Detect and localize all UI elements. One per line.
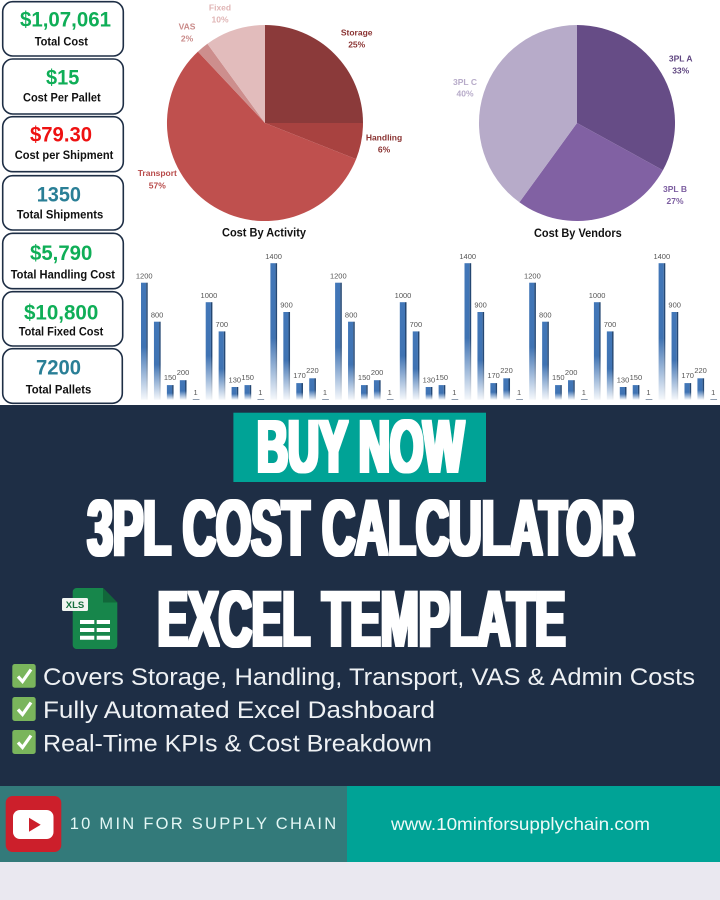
bar group 6: 220 xyxy=(500,366,513,375)
KPI: cost per pallet: Cost Per Pallet xyxy=(23,92,101,104)
bar group 6: 170 xyxy=(487,371,500,380)
KPI: total handling cost xyxy=(3,233,123,289)
pie chart: cost by vendors: 40% xyxy=(456,89,474,99)
bar group 8 xyxy=(589,291,652,400)
KPI: total handling cost: $5,790 xyxy=(30,242,92,265)
bar group 5: 130 xyxy=(423,376,435,384)
bar group 7: 800 xyxy=(539,310,552,319)
pie chart: cost by activity: VAS xyxy=(179,21,196,31)
pie chart: cost by vendors xyxy=(453,25,693,240)
bar group 7: 1 xyxy=(582,388,586,397)
footer: channel bar xyxy=(0,786,347,862)
panel: navy promo background xyxy=(0,405,720,786)
button: buy now xyxy=(233,405,486,488)
bullet: KPIs: Real-Time KPIs & Cost Breakdown xyxy=(43,731,432,758)
panel: KPI cards xyxy=(3,2,123,403)
bar group 1 xyxy=(136,271,199,400)
bar group 9: 900 xyxy=(668,300,681,310)
bar group 3 xyxy=(265,252,329,400)
KPI: cost per shipment: $79.30 xyxy=(30,124,92,147)
bar group 3: 1400 xyxy=(265,252,282,261)
bullet: cost coverage: Covers Storage, Handling, Transport, VAS & Admin Costs xyxy=(43,664,695,691)
KPI: total fixed cost: $10,800 xyxy=(24,301,98,324)
bar group 2: 130 xyxy=(229,376,241,384)
KPI: total cost xyxy=(3,2,123,56)
pie chart: cost by vendors: 33% xyxy=(672,66,690,76)
feature list xyxy=(12,664,695,758)
bar group 1: 1200 xyxy=(136,271,153,280)
pie chart: cost by activity: Handling xyxy=(366,133,402,143)
bar group 9: 170 xyxy=(681,371,694,380)
KPI: total handling cost: Total Handling Cost xyxy=(11,269,115,281)
pie chart: cost by activity: 10% xyxy=(211,15,229,25)
bar group 5: 1000 xyxy=(395,291,411,300)
bar group 9: 1400 xyxy=(653,252,670,261)
KPI: cost per shipment: Cost per Shipment xyxy=(15,150,113,162)
footer: website bar: www.10minforsupplychain.com xyxy=(390,814,650,834)
bar group 8: 150 xyxy=(630,373,642,382)
bar group 7: 200 xyxy=(565,368,577,377)
bar group 6: 900 xyxy=(474,300,487,310)
KPI: total cost: $1,07,061 xyxy=(20,9,111,32)
bar group 9: 1 xyxy=(711,388,715,397)
bar group 4: 150 xyxy=(358,373,370,382)
bar group 5: 1 xyxy=(452,388,456,397)
pie chart: cost by vendors: Cost By Vendors xyxy=(534,228,622,240)
bar group 5: 700 xyxy=(410,320,422,329)
bar group 8: 700 xyxy=(604,320,616,329)
pie chart: cost by activity: 25% xyxy=(348,39,366,49)
bar group 1: 200 xyxy=(177,368,189,377)
pie chart: cost by activity: 6% xyxy=(378,144,391,154)
icon: YouTube xyxy=(6,796,61,852)
KPI: cost per pallet xyxy=(3,59,123,114)
bar group 6: 1 xyxy=(517,388,521,397)
bar group 2: 1000 xyxy=(201,291,217,300)
bar group 7: 1200 xyxy=(524,271,541,280)
button: buy now: BUY NOW xyxy=(257,405,464,488)
footer: website bar xyxy=(347,786,720,862)
pie chart: cost by vendors: 3PL A xyxy=(669,54,693,64)
bar group 3: 170 xyxy=(293,371,306,380)
KPI: total shipments xyxy=(3,176,123,230)
bullet: automated dashboard: Fully Automated Excel Dashboard xyxy=(43,697,435,724)
KPI: cost per pallet: $15 xyxy=(46,67,80,90)
bar group 4: 1 xyxy=(388,388,392,397)
bar group 3: 900 xyxy=(280,300,293,310)
bar group 4 xyxy=(330,271,394,400)
KPI: total fixed cost xyxy=(3,292,123,346)
pie chart: cost by activity: 57% xyxy=(149,180,166,190)
bar group 9: 220 xyxy=(694,366,707,375)
bar group 5 xyxy=(395,291,458,400)
bar chart: cost columns xyxy=(136,252,717,400)
pie chart: cost by vendors: 3PL C xyxy=(453,77,477,87)
bar group 8: 130 xyxy=(617,376,629,384)
bar group 7: 150 xyxy=(552,373,565,382)
KPI: cost per shipment xyxy=(3,117,123,172)
pie chart: cost by activity xyxy=(138,3,402,240)
icon: Excel XLS file xyxy=(62,588,117,649)
bar group 9 xyxy=(653,252,717,400)
bar group 8: 1 xyxy=(646,388,651,397)
bar group 4: 200 xyxy=(371,368,383,377)
KPI: total shipments: Total Shipments xyxy=(17,209,103,221)
bar group 8: 1000 xyxy=(589,291,605,300)
footer: channel bar: 10 MIN FOR SUPPLY CHAIN xyxy=(70,815,336,833)
bar group 3: 220 xyxy=(306,366,319,375)
KPI: total shipments: 1350 xyxy=(37,184,81,207)
KPI: total fixed cost: Total Fixed Cost xyxy=(19,326,103,338)
KPI: total pallets xyxy=(3,349,122,403)
bar group 2: 150 xyxy=(241,373,254,382)
bar group 6: 1400 xyxy=(459,252,476,261)
KPI: total pallets: 7200 xyxy=(36,356,81,379)
pie chart: cost by activity: Cost By Activity xyxy=(222,228,307,240)
bar group 3: 1 xyxy=(323,388,327,397)
pie chart: cost by activity: Fixed xyxy=(209,3,231,13)
pie chart: cost by vendors: 27% xyxy=(666,196,684,206)
bar group 7 xyxy=(524,271,588,400)
bar group 2: 1 xyxy=(258,388,262,397)
bottom strip xyxy=(0,862,720,900)
pie chart: cost by activity: Transport xyxy=(138,168,177,178)
bar group 5: 150 xyxy=(436,373,448,382)
pie chart: cost by activity: Storage xyxy=(341,27,373,37)
KPI: total pallets: Total Pallets xyxy=(26,384,91,396)
pie chart: cost by activity: 2% xyxy=(181,34,194,44)
pie chart: cost by vendors: 3PL B xyxy=(663,184,687,194)
bar group 1: 800 xyxy=(151,310,163,319)
bar group 1: 150 xyxy=(164,373,176,382)
bar group 2: 700 xyxy=(216,320,228,329)
bar group 1: 1 xyxy=(194,388,198,397)
bar group 6 xyxy=(459,252,523,400)
bar group 4: 800 xyxy=(345,310,357,319)
bar group 2 xyxy=(201,291,264,400)
KPI: total cost: Total Cost xyxy=(35,37,88,49)
bar group 4: 1200 xyxy=(330,271,347,280)
icon: Excel XLS file: XLS xyxy=(66,600,84,611)
